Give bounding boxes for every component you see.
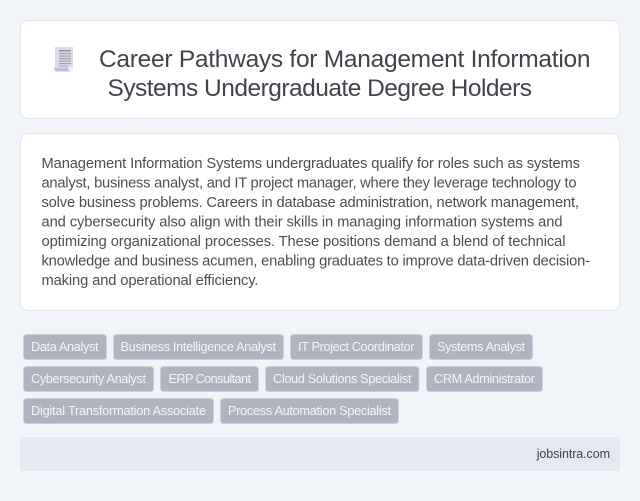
text block: description paragraph — [42, 156, 590, 289]
tag: Systems Analyst: Systems Analyst — [437, 340, 525, 354]
text block: description paragraph: making and operational efficiency. — [42, 273, 258, 289]
tag: CRM Administrator: CRM Administrator — [434, 372, 536, 386]
tag: Digital Transformation Associate: Digital Transformation Associate — [31, 404, 206, 418]
tag: Process Automation Specialist: Process Automation Specialist — [228, 404, 391, 418]
panel: description — [20, 134, 620, 310]
panel: header — [20, 20, 620, 118]
text block: description paragraph: solve business problems. Careers in database administration, network management, — [42, 195, 579, 211]
tag: Business Intelligence Analyst: Business Intelligence Analyst — [120, 340, 276, 354]
tag: IT Project Coordinator — [290, 334, 422, 360]
text block: description paragraph: knowledge and business acumen, enabling graduates to improve data-driven decision- — [42, 254, 590, 270]
tag: Systems Analyst — [430, 334, 532, 360]
text block: description paragraph: analyst, business analyst, and IT project manager, where they leverage technology to — [42, 176, 576, 192]
text block: description paragraph: optimizing organizational processes. These positions demand a blend of technical — [42, 234, 566, 250]
tag: ERP Consultant — [160, 366, 258, 392]
tag: Cloud Solutions Specialist — [266, 366, 419, 392]
footer bar — [20, 437, 620, 471]
tag: Cybersecurity Analyst: Cybersecurity Analyst — [31, 372, 146, 386]
tag: Data Analyst: Data Analyst — [31, 340, 99, 354]
tag: Business Intelligence Analyst — [114, 334, 284, 360]
tag: IT Project Coordinator: IT Project Coordinator — [298, 340, 415, 354]
text block: description paragraph: Management Information Systems undergraduates qualify for roles such as systems — [42, 156, 580, 172]
tag: Data Analyst — [24, 334, 106, 360]
text block: description paragraph: and cybersecurity also align with their skills in managing information systems and — [42, 214, 562, 230]
title: Career Pathways for Management Information — [99, 46, 590, 73]
tag: Digital Transformation Associate — [24, 398, 214, 424]
icon: document scroll — [54, 47, 73, 72]
tag: ERP Consultant: ERP Consultant — [168, 372, 251, 386]
tags: career roles — [24, 334, 542, 424]
title — [99, 46, 590, 102]
tag: Cloud Solutions Specialist: Cloud Solutions Specialist — [273, 372, 412, 386]
tag: CRM Administrator — [426, 366, 542, 392]
title: Systems Undergraduate Degree Holders — [108, 75, 532, 102]
tag: Cybersecurity Analyst — [24, 366, 154, 392]
tag: Process Automation Specialist — [220, 398, 398, 424]
footer source text: jobsintra.com — [536, 447, 610, 461]
